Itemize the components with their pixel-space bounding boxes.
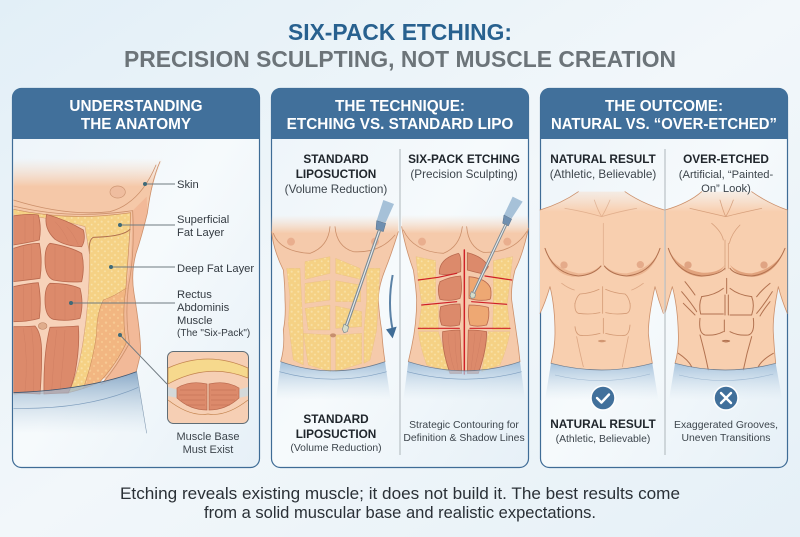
cannula: etching — [470, 197, 523, 298]
heading: six-pack etching — [408, 152, 520, 181]
panel header: outcome — [540, 88, 788, 139]
heading: standard liposuction: STANDARD — [303, 152, 369, 166]
label: deep fat layer: Deep Fat Layer — [177, 263, 254, 275]
footer statement: Etching reveals existing muscle; it does not build it. The best results come — [120, 485, 680, 503]
caption: standard liposuction: LIPOSUCTION — [296, 427, 376, 441]
caption: strategic contouring — [403, 420, 525, 444]
inset caption: Muscle Base — [177, 431, 239, 443]
heading: standard liposuction — [285, 152, 387, 196]
divider — [399, 149, 401, 455]
nipple — [110, 186, 125, 198]
jeans — [669, 363, 782, 400]
label: rectus abdominis: Rectus — [177, 289, 212, 301]
caption: standard liposuction — [290, 412, 382, 454]
label: rectus abdominis: Abdominis — [177, 302, 230, 314]
icon: cross — [714, 386, 738, 410]
label: rectus abdominis — [69, 289, 250, 339]
leader to inset — [118, 333, 167, 384]
navel — [38, 323, 47, 329]
panel: the technique — [272, 88, 528, 468]
torso: natural — [540, 192, 664, 400]
panel header: technique: THE TECHNIQUE: — [335, 98, 465, 115]
caption: natural result: (Athletic, Believable) — [556, 434, 650, 445]
footer statement — [120, 485, 680, 522]
exaggerated grooves — [678, 278, 773, 370]
rectus abdominis muscle blocks — [13, 214, 84, 394]
caption: standard liposuction: (Volume Reduction) — [290, 443, 382, 454]
fat deposits — [287, 257, 380, 372]
label: superficial fat layer — [118, 214, 229, 239]
arrow: downward — [386, 275, 397, 338]
superficial fat layer — [13, 209, 131, 393]
heading: over-etched — [679, 152, 774, 195]
heading: natural result — [550, 152, 657, 181]
heading: natural result: (Athletic, Believable) — [550, 168, 656, 181]
footer statement: from a solid muscular base and realistic expectations. — [204, 504, 596, 522]
caption: strategic contouring: Strategic Contouring for — [409, 420, 519, 431]
label: superficial fat layer: Superficial — [177, 214, 229, 226]
heading: standard liposuction: (Volume Reduction) — [285, 183, 387, 196]
title: SIX-PACK ETCHING: — [288, 19, 512, 45]
torso: over-etched — [665, 192, 787, 400]
icon: check — [591, 386, 615, 410]
label: rectus abdominis: (The "Six-Pack") — [177, 328, 250, 339]
title — [124, 19, 676, 72]
panel header: outcome: NATURAL VS. “OVER-ETCHED” — [551, 116, 777, 133]
torso: six-pack etching — [402, 215, 528, 400]
anatomy torso illustration — [13, 158, 163, 433]
heading: six-pack etching: SIX-PACK ETCHING — [408, 152, 520, 166]
label: deep fat layer — [109, 263, 254, 275]
etching lines — [418, 250, 512, 374]
deep fat boundary — [89, 229, 130, 253]
heading: standard liposuction: LIPOSUCTION — [296, 167, 376, 181]
caption: over-etched: Exaggerated Grooves, — [674, 420, 778, 431]
heading: over-etched: OVER-ETCHED — [683, 152, 769, 166]
panel header: outcome: THE OUTCOME: — [605, 98, 723, 115]
jeans — [14, 372, 144, 424]
jeans — [276, 362, 391, 400]
heading: six-pack etching: (Precision Sculpting) — [410, 168, 518, 181]
torso: standard liposuction — [272, 215, 398, 400]
caption: natural result — [550, 417, 657, 445]
panel header: technique: ETCHING VS. STANDARD LIPO — [287, 116, 513, 133]
panel header: anatomy: UNDERSTANDING — [69, 98, 203, 115]
heading: over-etched: (Artificial, “Painted- — [679, 169, 774, 181]
label: superficial fat layer: Fat Layer — [177, 227, 225, 239]
inset: muscle cross-section — [168, 352, 248, 424]
inset caption — [177, 431, 239, 456]
caption: natural result: NATURAL RESULT — [550, 417, 657, 431]
panel header: anatomy: THE ANATOMY — [81, 116, 191, 133]
panel: understanding the anatomy — [12, 88, 260, 468]
panel: the outcome — [540, 88, 788, 468]
etched muscle blocks — [438, 253, 491, 373]
fat columns — [416, 257, 513, 372]
inset caption: Must Exist — [183, 444, 233, 456]
divider — [664, 149, 666, 455]
label: skin: Skin — [177, 179, 199, 191]
pectoral shadows — [545, 248, 660, 277]
caption: over-etched — [674, 420, 778, 444]
cannula: standard — [342, 200, 394, 333]
caption: standard liposuction: STANDARD — [303, 412, 369, 426]
jeans — [545, 363, 658, 400]
heading: natural result: NATURAL RESULT — [550, 152, 657, 166]
title: PRECISION SCULPTING, NOT MUSCLE CREATION — [124, 46, 676, 72]
panel header: technique — [272, 88, 528, 139]
label: skin — [143, 179, 199, 191]
caption: over-etched: Uneven Transitions — [682, 433, 770, 444]
panel header: anatomy — [12, 88, 260, 139]
navel — [330, 333, 336, 337]
label: rectus abdominis: Muscle — [177, 315, 212, 327]
jeans — [403, 362, 525, 400]
caption: strategic contouring: Definition & Shadow Lines — [403, 433, 525, 444]
heading: over-etched: On” Look) — [701, 183, 751, 195]
abdominal definition — [562, 283, 643, 367]
rectus sheath — [13, 215, 89, 393]
lower deep fat — [83, 288, 126, 388]
